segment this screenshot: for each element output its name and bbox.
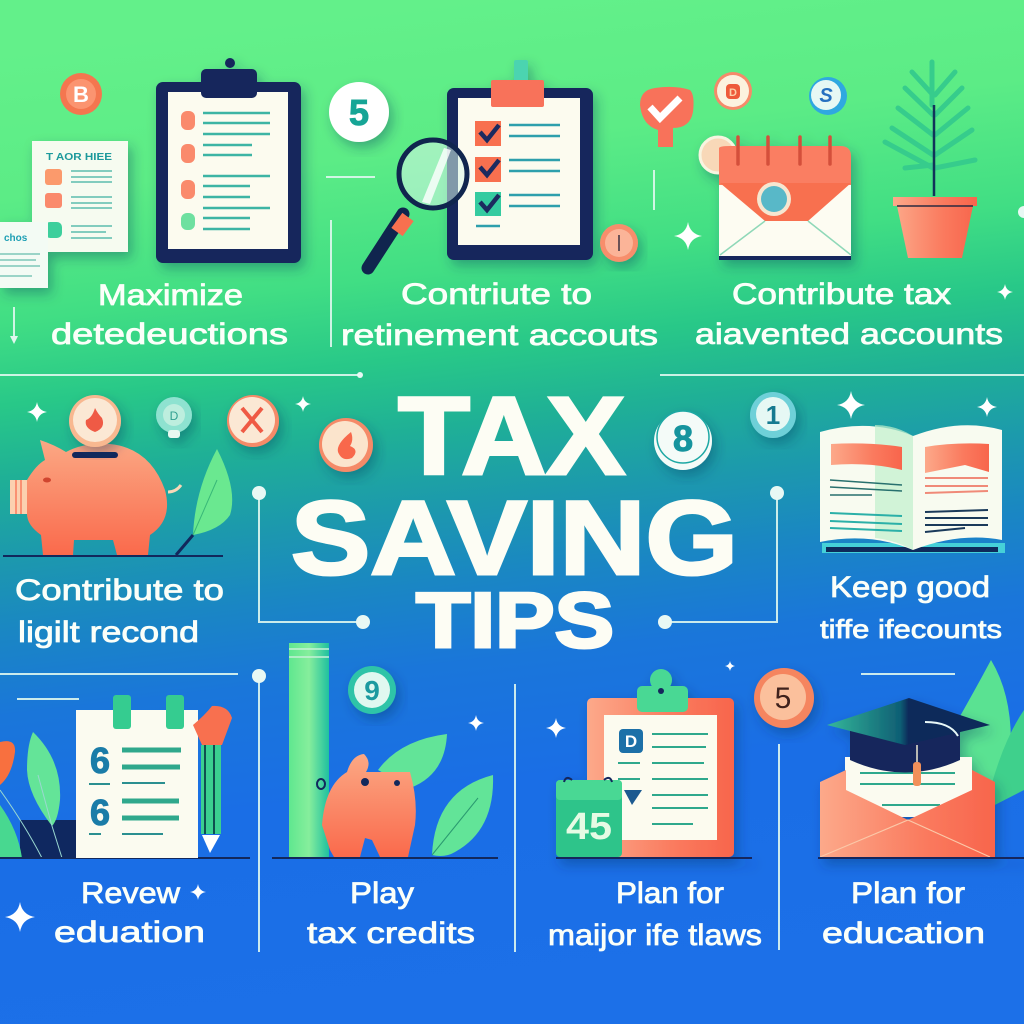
text: maximize deductions [51,279,288,351]
icon: piggy bank [3,440,223,556]
text: maximize deductions: Maximize [98,279,243,312]
icon: clipboard and calendar [556,669,752,858]
badge: S [809,77,847,115]
text: review education [54,877,205,949]
text: review education: Revew [81,877,180,910]
text: contribute to retirement accounts [341,278,658,352]
text: review education: eduation [54,916,205,949]
badge: coin I [600,224,638,262]
connector dots [252,206,1024,683]
text: keep good: Keep good [830,571,990,604]
icon: pencil [193,706,232,853]
icon: magnifier [368,140,467,268]
badge: 9 [348,666,396,714]
icon: notepad [76,695,198,858]
text: contribute tax advantaged accounts: Contribute tax [732,278,951,311]
icon: green bar with piggy [272,643,498,858]
badge: B top left [60,73,102,115]
badge: 1: 1 [766,400,780,430]
text: contribute to light record: Contribute to [15,574,224,607]
text: keep good: tiffe ifecounts [820,614,1002,644]
text: contribute to retirement accounts: Contriute to [401,278,592,311]
title: TIPS [416,576,614,664]
text: plan for education: Plan for [851,877,965,910]
icon: open book [820,425,1005,553]
text: maximize deductions: detedeuctions [51,318,288,351]
badge: S: S [819,85,833,107]
title: TAX [398,375,625,498]
icon: calendar envelope [700,137,851,260]
text: plan for education [822,877,985,950]
badge: 5 [329,82,389,142]
text: plan for education: education [822,917,985,950]
badge: 9: 9 [364,675,380,706]
icon: clipboard and calendar: 45 [566,806,612,848]
text: plan for major life: maijor ife tlaws [548,919,762,952]
icon: tax form [0,141,128,288]
badge: 5 coin: 5 [775,682,791,715]
badge: 5 coin [754,668,814,728]
icon: small arrow tip [10,336,18,344]
text: keep good [820,571,1002,644]
badge: D [714,72,752,110]
icon: clipboard 1 [156,58,301,263]
badge: D bulb [156,397,192,438]
icon: leaf [176,449,232,555]
icon: envelope with graduation cap [818,698,1024,858]
badge: 1 [750,392,796,438]
icon: plants left of notepad [0,732,250,858]
icon: speech check [640,87,694,147]
icon: potted plant [885,62,977,258]
badge: fan coin [227,395,279,447]
icon: leaves behind cap [955,660,1024,810]
icon: checklist clipboard [447,60,593,260]
text: contribute to light record [15,574,224,649]
icon: notepad: 6 [90,792,110,833]
text: play tax credits: tax credits [307,917,475,950]
text: plan for major life: Plan for [616,877,724,910]
icon: notepad: 6 [90,740,110,781]
connector lines [0,170,1024,952]
text: play tax credits: Play [350,877,414,910]
text: contribute to retirement accounts: retinement accouts [341,319,658,352]
text: contribute tax advantaged accounts: aiavented accounts [695,318,1003,351]
text: play tax credits [307,877,475,950]
title [291,375,738,664]
text: contribute to light record: ligilt recond [18,616,199,649]
badge: 6 coin [319,418,373,472]
badge: B top left: B [73,82,89,107]
badge: 5: 5 [349,92,369,133]
badge: piggy coin [69,395,121,447]
badge: D bulb: D [170,409,179,423]
badge: 8 [654,411,712,470]
icon: tax form: chos [4,233,28,244]
text: contribute tax advantaged accounts [695,278,1003,351]
badge: 8: 8 [673,418,693,459]
icon: tax form: T AOR HIEE [46,152,112,163]
text: plan for major life [548,877,762,952]
title: SAVING [291,480,738,597]
icon: clipboard and calendar: D [625,732,637,751]
sparkles [5,222,1013,932]
badge: D: D [729,87,737,99]
